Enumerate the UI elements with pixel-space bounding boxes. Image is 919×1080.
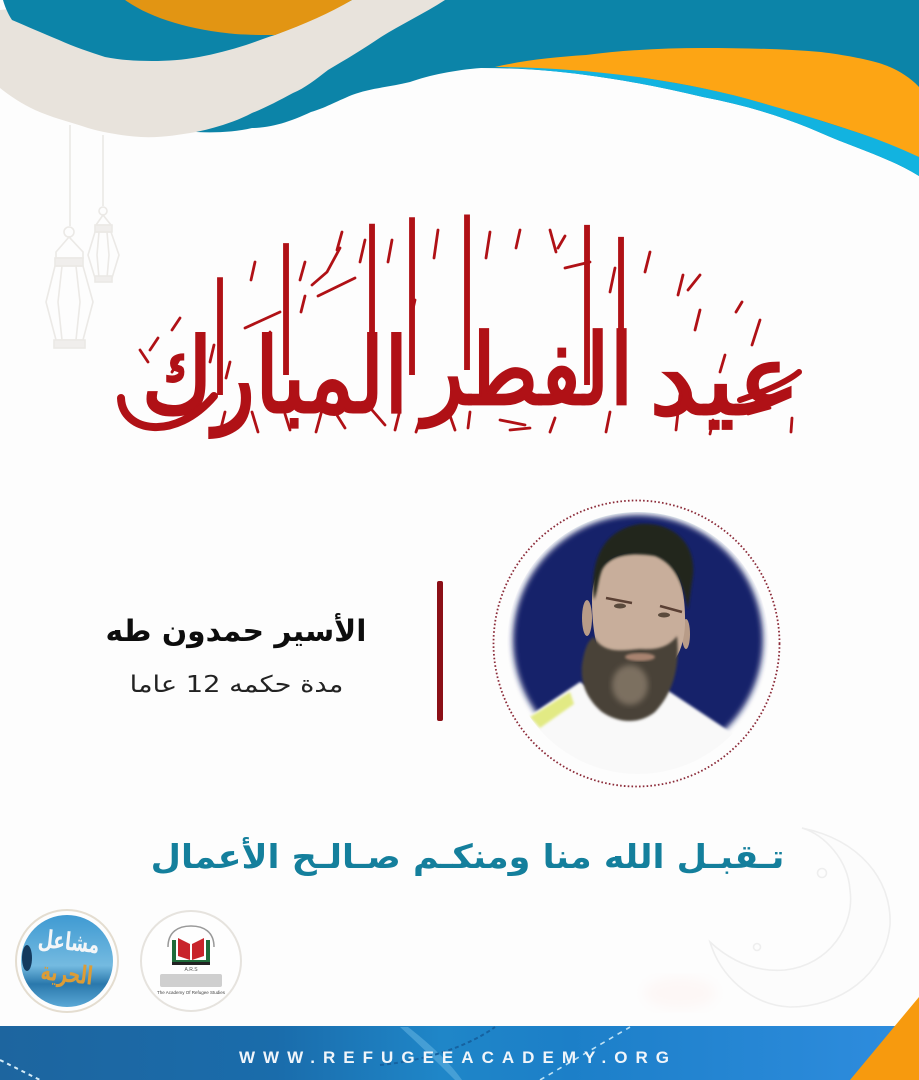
logo: Mashael al-Hurriya: مشاعل (37, 925, 101, 960)
title: Eid al-Fitr calligraphy: المبارك (142, 316, 408, 437)
dotted ring (494, 500, 780, 786)
photo (508, 512, 768, 732)
calligraphy tall alif strokes: ا (363, 193, 381, 409)
lantern decorations (46, 125, 119, 348)
calligraphy tall alif strokes: ا (277, 213, 295, 416)
calligraphy tall alif strokes: ا (403, 183, 421, 425)
logo: Academy of Refugee Studies (141, 911, 241, 1011)
sentence length: مدة حكمه 12 عاما (130, 671, 343, 697)
logo: Mashael al-Hurriya: الحرية (39, 957, 94, 992)
calligraphy tall alif strokes: ا (211, 253, 229, 433)
greeting line: تـقبـل الله منا ومنكـم صـالـح الأعمال (151, 836, 784, 877)
footer bar (0, 997, 919, 1080)
vertical red divider (437, 581, 443, 721)
calligraphy tall alif strokes: ا (578, 189, 596, 435)
orange corner (850, 997, 919, 1080)
website URL: WWW.REFUGEEACADEMY.ORG (239, 1048, 669, 1067)
calligraphy tall alif strokes: ا (458, 180, 476, 419)
prisoner portrait (494, 500, 780, 800)
title: Eid al-Fitr calligraphy: الفطر (419, 314, 633, 428)
logo: Academy of Refugee Studies: The Academy Of Refugee Studies (157, 990, 226, 995)
calligraphy tall alif strokes: ا (612, 204, 630, 438)
calligraphy flourishes and vowel marks (121, 230, 799, 434)
prisoner name: الأسير حمدون طه (106, 612, 366, 649)
title: Eid al-Fitr calligraphy (121, 180, 801, 438)
logo: Academy of Refugee Studies: A.R.S (184, 967, 198, 973)
title: Eid al-Fitr calligraphy: عيد (649, 324, 801, 438)
header wave shapes (0, 0, 919, 176)
calligraphy tall alif strokes (211, 180, 630, 438)
faint pink smudge (644, 977, 716, 1009)
crescent decoration (710, 828, 890, 1007)
logo: Mashael al-Hurriya (16, 910, 118, 1012)
